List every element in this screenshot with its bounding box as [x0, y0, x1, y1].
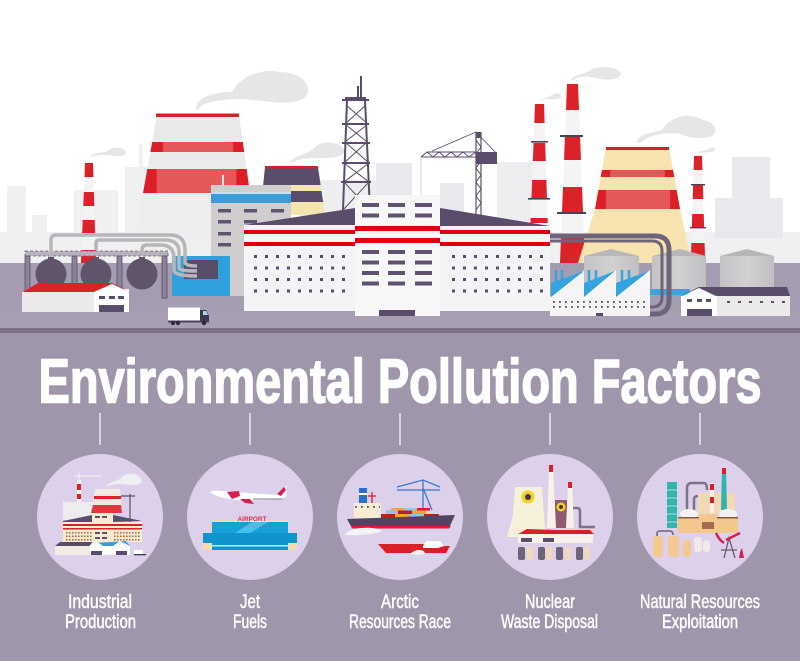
lattice tower: [341, 76, 371, 210]
factor: nuclear waste disposal: [487, 454, 613, 633]
main factory: right wing: [440, 208, 550, 311]
label: Industrial: [68, 591, 132, 613]
road edge stripe: [0, 328, 800, 333]
label: Arctic: [381, 591, 419, 613]
cooling tower: dark small: [263, 166, 325, 215]
factor: natural resources exploitation: [637, 454, 763, 633]
circle background: [337, 454, 463, 580]
right small chimney: [690, 156, 706, 256]
label: [501, 591, 598, 633]
ground band: [0, 263, 800, 328]
icon: plane and airport: [203, 485, 297, 550]
label: Nuclear: [525, 591, 575, 613]
label: [233, 591, 267, 633]
connector ticks: [99, 413, 701, 445]
dark pipes: [550, 236, 669, 314]
pipe rack with spheres: [25, 251, 168, 298]
icon: plane and airport: AIRPORT: [238, 517, 267, 523]
main factory: centre block: [355, 195, 440, 316]
grey pipes: [51, 235, 197, 276]
city skyline: [0, 144, 800, 264]
smoke clouds: [89, 67, 715, 164]
label: Resources Race: [349, 611, 451, 633]
label: Fuels: [233, 611, 267, 633]
grey office building: [211, 175, 291, 296]
factor: industrial production: [37, 454, 163, 633]
lower panel: [0, 333, 800, 661]
label: Natural Resources: [640, 591, 760, 613]
right chimney B: [557, 84, 586, 263]
cooling tower: cream: [575, 147, 695, 265]
label: [640, 591, 760, 633]
delivery truck: [168, 308, 209, 325]
label: Production: [65, 611, 136, 633]
label: [349, 591, 451, 633]
factor: arctic resources race: [337, 454, 463, 633]
label: [65, 591, 136, 633]
factor: jet fuels: [187, 454, 313, 633]
main factory: left wing: [244, 208, 355, 311]
circle background: [37, 454, 163, 580]
label: Exploitation: [662, 611, 738, 633]
circle background: [487, 454, 613, 580]
right chimney A: [528, 104, 550, 225]
label: Waste Disposal: [501, 611, 598, 633]
small factory: dark roof: [680, 287, 790, 316]
left chimney: [81, 163, 96, 263]
circle background: [187, 454, 313, 580]
storage tanks: [584, 249, 774, 296]
icon: refinery: [653, 468, 744, 558]
circle background: [637, 454, 763, 580]
tower crane: [421, 132, 497, 215]
icon: factory: [55, 473, 146, 555]
small factory: red roof: [22, 283, 130, 312]
label: Jet: [240, 591, 260, 613]
sawtooth factory: [550, 270, 650, 316]
icon: nuclear plant: [507, 465, 595, 560]
blue utility box: [172, 256, 230, 296]
road strip: [0, 311, 800, 328]
cooling tower: large white: [143, 114, 249, 232]
icon: ships: [345, 480, 455, 555]
